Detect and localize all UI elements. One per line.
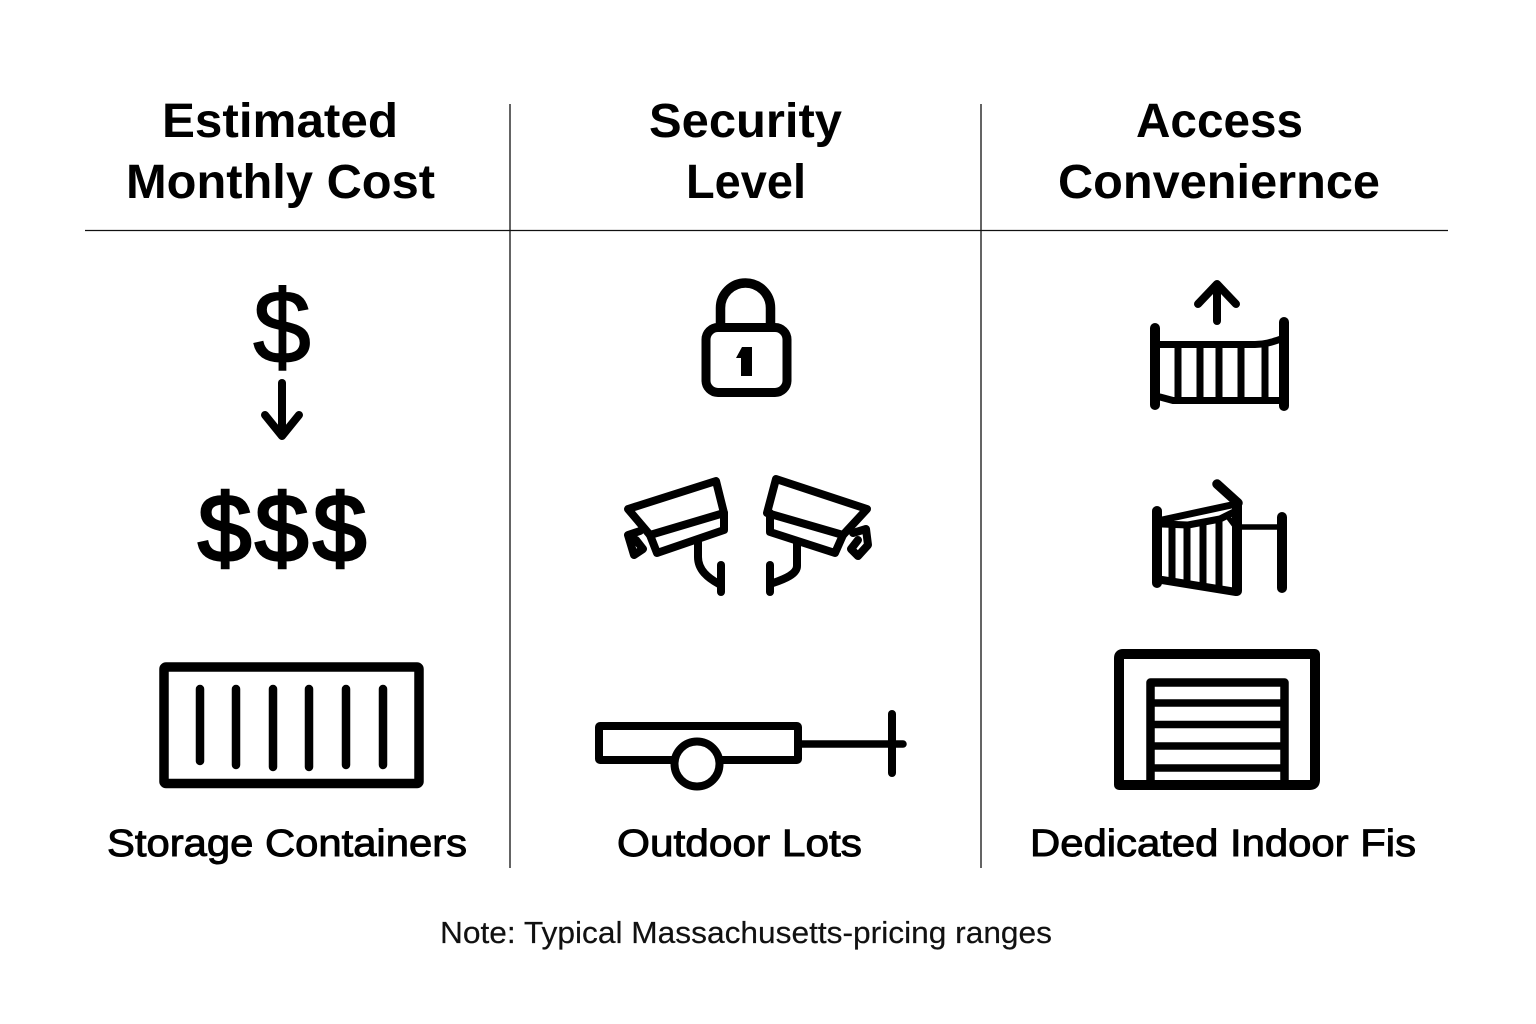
column heading: Estimated Monthly Cost <box>126 95 435 209</box>
icon: security cameras <box>628 479 868 592</box>
column heading: Estimated Monthly Cost: Monthly Cost <box>126 156 435 209</box>
icon: padlock <box>706 283 787 392</box>
column heading: Estimated Monthly Cost: Estimated <box>162 95 398 148</box>
icon: single dollar sign: $ <box>253 270 311 386</box>
footnote: Note: Typical Massachusetts-pricing ranges <box>440 915 1052 950</box>
icon: storage container <box>164 667 419 784</box>
label: Dedicated Indoor Fis: Dedicated Indoor Fis <box>1030 823 1416 865</box>
column heading: Security Level <box>649 95 842 209</box>
icon: down arrow <box>265 383 299 436</box>
column heading: Access Convenience: Conveniernce <box>1058 156 1380 209</box>
column heading: Security Level: Level <box>686 156 806 209</box>
column heading: Access Convenience: Access <box>1136 95 1303 148</box>
icon: outdoor lot trailer <box>599 714 903 786</box>
column heading: Access Convenience <box>1058 95 1380 209</box>
icon: lift gate with up arrow <box>1155 284 1284 406</box>
icon: swing gate <box>1157 484 1282 592</box>
label: Storage Containers: Storage Containers <box>107 823 467 865</box>
right camera <box>767 479 868 592</box>
column heading: Security Level: Security <box>649 95 842 148</box>
icon: indoor garage <box>1119 654 1315 785</box>
left camera <box>628 481 724 592</box>
icon: triple dollar sign: $$$ <box>198 475 366 582</box>
label: Outdoor Lots: Outdoor Lots <box>617 823 862 865</box>
